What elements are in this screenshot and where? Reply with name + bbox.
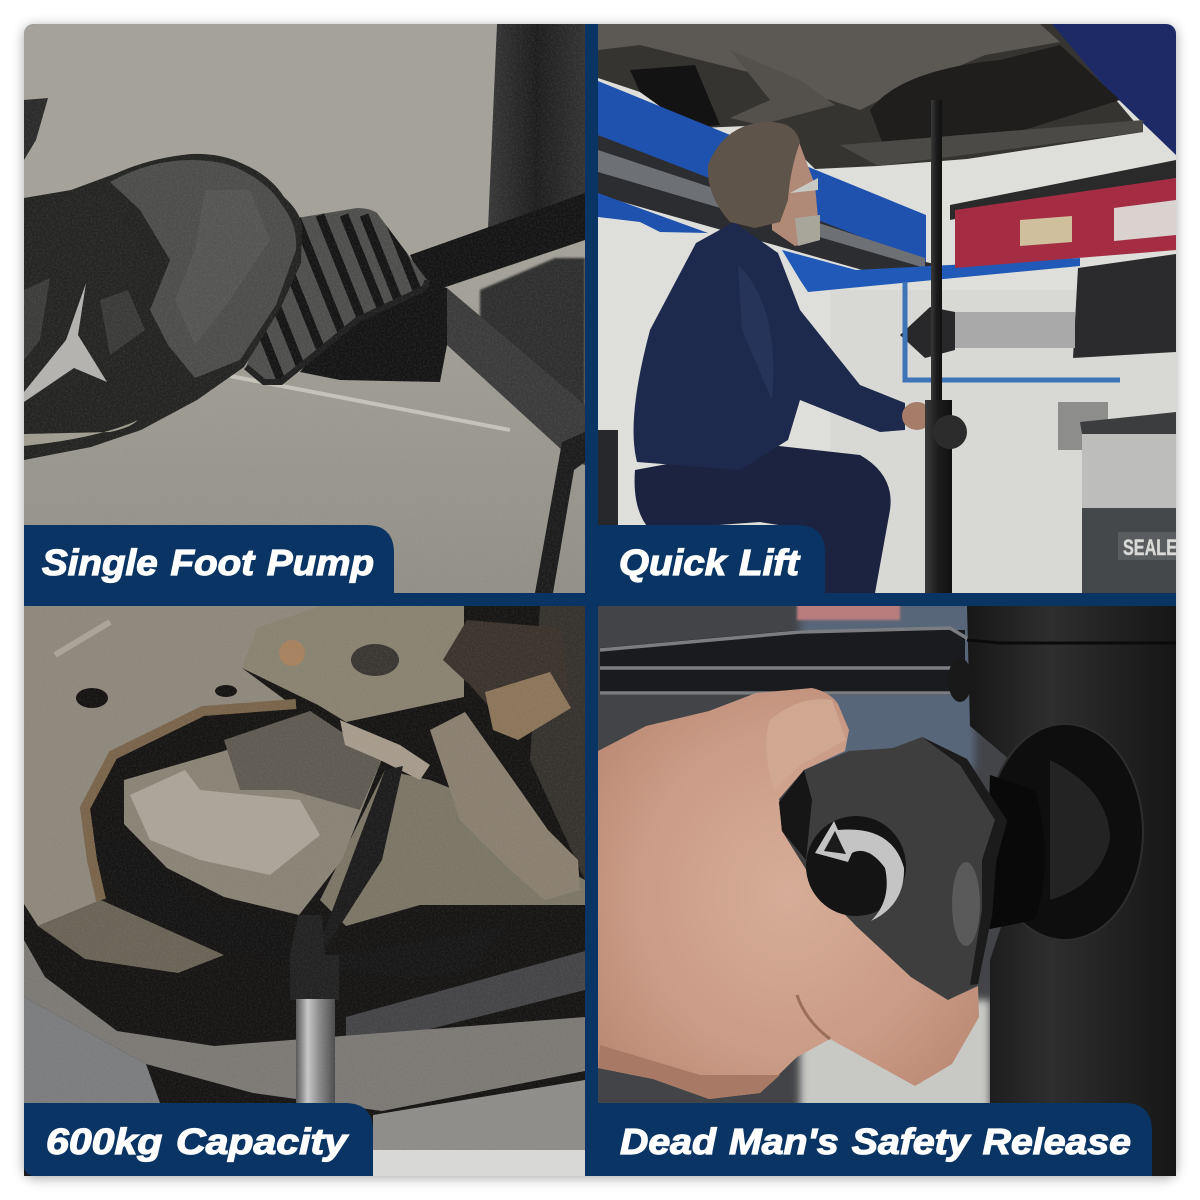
target head bbox=[900, 307, 955, 358]
scratch mark bbox=[55, 622, 110, 655]
lifting pole bbox=[925, 100, 967, 593]
chassis holes bbox=[76, 685, 237, 708]
mechanic: beard bbox=[795, 215, 820, 246]
tyre bbox=[630, 65, 720, 128]
pedal support block bbox=[300, 283, 447, 382]
heading: 600kg capacity: 600kg Capacity bbox=[46, 1121, 349, 1162]
panel: 600kg capacity photo bbox=[24, 606, 585, 1176]
lace hook at top edge bbox=[24, 98, 48, 160]
wheel aligner cabinet bbox=[1080, 412, 1177, 593]
dark underbody base bbox=[24, 606, 585, 1176]
equipment label bbox=[1114, 200, 1176, 241]
blurred lower left bbox=[24, 997, 160, 1103]
label: single foot pump bbox=[24, 525, 394, 593]
engine dark streak bbox=[224, 711, 382, 810]
blurred red object bbox=[797, 602, 900, 620]
monitor bbox=[1073, 254, 1176, 358]
valve highlight bbox=[1050, 760, 1110, 900]
blue lift runway bbox=[598, 81, 926, 262]
left dark bin bbox=[598, 430, 618, 525]
foot pedal bbox=[244, 208, 430, 385]
frame plate bbox=[447, 288, 585, 465]
rust cube bbox=[485, 672, 571, 740]
runway light rail bbox=[598, 150, 925, 268]
saddle arm lower right bbox=[339, 926, 507, 979]
saddle arm upper right bbox=[317, 766, 403, 951]
sill bbox=[840, 120, 1143, 166]
suspension arm bbox=[730, 50, 835, 125]
blurred workshop background bbox=[598, 606, 1176, 1176]
knob arrow badge bbox=[806, 816, 906, 921]
lower blue runway bbox=[598, 193, 708, 233]
rear column bbox=[480, 258, 585, 415]
mechanic: neck and face bbox=[770, 142, 820, 246]
brand text: SEALE bbox=[1123, 535, 1177, 560]
mechanic: jacket bbox=[634, 222, 905, 470]
blue pipes bbox=[905, 282, 1120, 380]
black pump column bbox=[488, 24, 585, 228]
blurred blue wall bbox=[800, 600, 975, 770]
white floor edge bbox=[373, 1150, 585, 1176]
knob dark rim bbox=[922, 737, 1007, 985]
equipment plate bbox=[1020, 216, 1072, 246]
jacket highlight bbox=[738, 265, 773, 400]
saddle arm left bbox=[94, 839, 289, 962]
lower frame bbox=[24, 940, 585, 1111]
panel: dead man's safety release photo bbox=[598, 600, 1176, 1176]
valve flange bbox=[987, 724, 1143, 940]
upper right dark recess bbox=[530, 606, 585, 880]
lower left casing bbox=[38, 900, 224, 973]
underbody recess bbox=[870, 45, 1120, 150]
blurred pale floor bbox=[800, 1000, 990, 1110]
runway rails bbox=[598, 135, 931, 270]
saddle head bbox=[290, 915, 339, 1000]
lift column bbox=[967, 606, 1176, 1176]
engine light ribs bbox=[130, 770, 320, 875]
mechanic: hand bbox=[902, 402, 932, 430]
control arm bbox=[430, 712, 580, 900]
chrome ram bbox=[296, 999, 335, 1105]
rusty bracket block bbox=[443, 620, 571, 740]
floor crack bbox=[230, 376, 510, 430]
metal grain bbox=[24, 606, 585, 1176]
concrete floor bbox=[24, 24, 585, 593]
rusty bracket bbox=[242, 606, 464, 722]
knob side lobe bbox=[952, 862, 980, 946]
bracket arm bbox=[340, 720, 430, 780]
mechanic: hair bbox=[708, 122, 800, 228]
hand bbox=[598, 688, 979, 1099]
label: quick lift bbox=[598, 525, 825, 593]
heading: quick lift: Quick Lift bbox=[619, 542, 801, 583]
dark blue lift arm bbox=[1040, 24, 1176, 155]
wheel target bbox=[945, 312, 1075, 348]
heading: dead man's safety release: Dead Man's Safety Release bbox=[620, 1121, 1131, 1162]
valve collar bbox=[985, 775, 1045, 930]
car underside bbox=[598, 24, 1143, 169]
handle wire loop bbox=[600, 628, 970, 695]
rust edge of the arch bbox=[85, 704, 296, 900]
engine block bbox=[124, 711, 382, 915]
heading: single foot pump: Single Foot Pump bbox=[42, 542, 374, 583]
knob left dark edge bbox=[779, 770, 812, 860]
column bolt bbox=[948, 658, 972, 702]
dark crossbar bbox=[346, 951, 585, 1050]
shoe bbox=[24, 154, 302, 460]
panel: single foot pump photo bbox=[24, 24, 585, 593]
panel: quick lift photo bbox=[598, 24, 1177, 593]
concrete grain bbox=[24, 24, 585, 593]
workshop wall bbox=[598, 24, 1176, 525]
mechanic: trousers bbox=[635, 445, 891, 593]
dark top of equipment box bbox=[950, 160, 1176, 220]
right engine casing bbox=[320, 770, 585, 926]
mechanic: glasses bbox=[790, 178, 818, 193]
chassis plate bbox=[24, 606, 330, 926]
column cap line bbox=[967, 640, 1176, 643]
underbody plate bbox=[598, 24, 1060, 110]
label: 600kg capacity bbox=[24, 1103, 373, 1176]
stand leg bbox=[535, 432, 585, 593]
bracket bolt bbox=[279, 640, 305, 666]
release knob bbox=[779, 737, 1007, 1000]
red equipment box bbox=[955, 178, 1176, 268]
label: dead man's safety release bbox=[598, 1103, 1152, 1176]
wall bracket bbox=[1058, 402, 1108, 450]
lower blue section bbox=[782, 250, 1080, 292]
undertray bbox=[373, 1080, 585, 1150]
bracket hole bbox=[351, 644, 399, 676]
pedal arm bbox=[410, 193, 585, 293]
